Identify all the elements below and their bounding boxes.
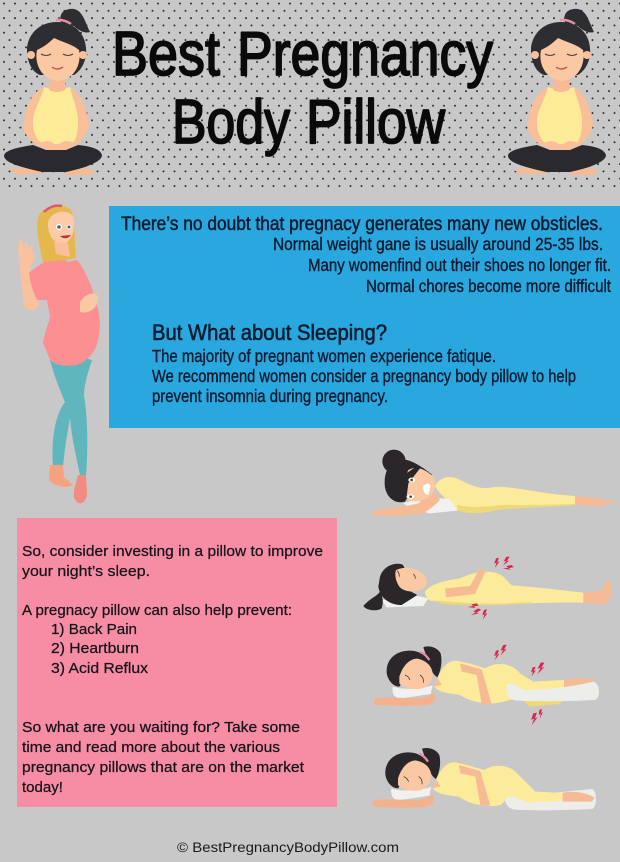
- text block: sleeping: [152, 346, 576, 406]
- text block: call to action: time and read more about the various: [22, 739, 280, 756]
- icon: meditating pregnant woman left: [4, 9, 102, 175]
- text block: obstacles: [121, 214, 611, 296]
- header panel: [0, 0, 620, 192]
- title: Pregnancy: [237, 20, 493, 89]
- panel: pink advice: [17, 518, 337, 807]
- icon: pain bolts above: [494, 556, 514, 573]
- footer credit: © BestPregnancyBodyPillow.com: [177, 840, 399, 855]
- list: prevented conditions: 2) Heartburn: [51, 640, 139, 657]
- illustration: woman sleeping on stomach: [372, 450, 617, 516]
- illustration: woman on back with pain: [363, 556, 612, 620]
- text block: invest: So, consider investing in a pillow to improve: [22, 543, 323, 560]
- text block: sleeping: prevent insomnia during pregnancy.: [152, 386, 388, 406]
- panel: blue intro: [109, 206, 620, 428]
- icon: meditating pregnant woman right: [508, 9, 606, 175]
- list: prevented conditions: A pregnacy pillow can also help prevent:: [22, 602, 292, 619]
- list: prevented conditions: 3) Acid Reflux: [51, 660, 149, 677]
- text block: call to action: [22, 719, 305, 796]
- icon: pain bolts shin: [531, 709, 544, 725]
- illustration: side sleeper with pain and small pillow: [374, 644, 599, 725]
- illustration: pregnant woman waving: [18, 205, 100, 503]
- icon: pain bolts knee: [531, 662, 545, 676]
- text block: sleeping: The majority of pregnant women experience fatique.: [152, 346, 496, 366]
- text block: call to action: pregnancy pillows that are on the market: [22, 759, 305, 776]
- icon: pain bolts hip: [494, 644, 507, 660]
- dotted header background: [0, 0, 620, 192]
- list: prevented conditions: 1) Back Pain: [51, 621, 137, 638]
- text block: invest: your night’s sleep.: [22, 563, 150, 580]
- icon: pain bolts below: [467, 601, 488, 620]
- illustration: relaxed side sleeper with body pillow: [373, 748, 596, 810]
- text block: call to action: So what are you waiting for? Take some: [22, 719, 300, 736]
- title: Best: [112, 20, 220, 89]
- text block: call to action: today!: [22, 779, 63, 796]
- title: Pillow: [306, 88, 445, 157]
- title: [112, 20, 493, 157]
- heading: sleeping: But What about Sleeping?: [152, 320, 387, 345]
- list: prevented conditions: [22, 602, 292, 677]
- title: Body: [172, 88, 290, 157]
- text block: invest: [22, 543, 323, 580]
